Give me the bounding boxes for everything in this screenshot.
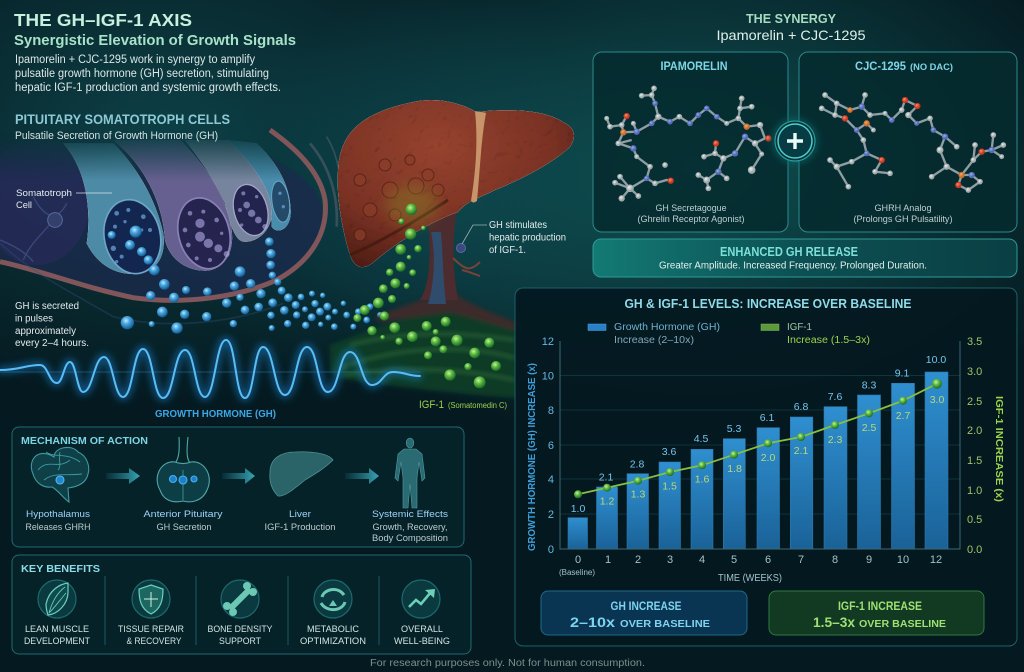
icon: rising trend bbox=[402, 580, 440, 618]
IGF-1 value labels: 2.7 bbox=[896, 410, 910, 422]
callout: hepatic production: of IGF-1. bbox=[489, 245, 526, 256]
GH value labels: 9.1 bbox=[895, 368, 909, 380]
right axis ticks: 0.0 bbox=[967, 544, 982, 556]
legend: IGF-1 bbox=[787, 322, 812, 333]
title block: hepatic IGF-1 production and systemic growth effects. bbox=[15, 82, 281, 94]
benefit labels: SUPPORT bbox=[219, 636, 261, 646]
x axis labels: 8 bbox=[832, 554, 838, 566]
GH value labels: 10.0 bbox=[926, 354, 946, 366]
x axis labels: 2 bbox=[635, 554, 641, 566]
title block bbox=[14, 10, 296, 94]
x axis labels: 0 bbox=[575, 554, 581, 566]
caption: CJC-1295: (Prolongs GH Pulsatility) bbox=[854, 214, 952, 225]
heading: pituitary somatotroph cells: Pulsatile Secretion of Growth Hormone (GH) bbox=[15, 130, 218, 142]
right axis ticks bbox=[967, 336, 982, 556]
molecule: ipamorelin bbox=[605, 86, 771, 201]
benefit labels: DEVELOPMENT bbox=[24, 636, 90, 646]
IGF-1 value labels: 1.6 bbox=[695, 474, 709, 486]
mechanism labels: IGF-1 Production bbox=[264, 522, 336, 533]
arrow: pituitary to liver bbox=[222, 468, 255, 484]
illustration: portal vein and tissue bbox=[330, 205, 518, 398]
x axis labels: 7 bbox=[798, 554, 804, 566]
banner: enhanced GH release: Greater Amplitude. Increased Frequency. Prolonged Duration. bbox=[659, 260, 927, 272]
heading: CJC-1295: (NO DAC) bbox=[910, 62, 953, 73]
heading: key benefits: KEY BENEFITS bbox=[21, 563, 100, 575]
heading: pituitary somatotroph cells: PITUITARY SOMATOTROPH CELLS bbox=[15, 112, 230, 127]
heading: CJC-1295: CJC-1295 bbox=[855, 61, 907, 73]
left axis ticks: 0 bbox=[548, 544, 554, 556]
GH value labels: 1.0 bbox=[571, 503, 585, 515]
caption: CJC-1295: GHRH Analog bbox=[874, 203, 932, 214]
left axis ticks: 6 bbox=[548, 440, 554, 452]
bars: growth hormone bbox=[568, 372, 948, 549]
stat: IGF-1 increase: 1.5–3x bbox=[813, 614, 855, 630]
illustration: IGF-1 green particles bbox=[353, 204, 501, 388]
mechanism labels: Growth, Recovery, bbox=[372, 522, 448, 533]
callout: somatotroph cell bbox=[16, 188, 112, 211]
right axis ticks: 0.5 bbox=[967, 514, 982, 526]
benefit labels bbox=[24, 624, 450, 646]
banner: enhanced GH release: ENHANCED GH RELEASE bbox=[720, 245, 858, 259]
IGF-1 value labels: 2.5 bbox=[862, 422, 876, 434]
callout: pulse timing: in pulses bbox=[15, 314, 53, 324]
GH value labels bbox=[571, 354, 946, 515]
label: IGF-1 somatomedin C bbox=[419, 399, 507, 411]
panel: GH and IGF-1 chart bbox=[515, 288, 1017, 646]
benefit labels: METABOLIC bbox=[307, 624, 360, 634]
GH value labels: 2.1 bbox=[599, 472, 613, 484]
icon: metabolic cycle bbox=[314, 580, 352, 618]
label: IGF-1 somatomedin C: IGF-1 bbox=[419, 399, 444, 411]
x axis labels: 3 bbox=[667, 554, 673, 566]
IGF-1 value labels: 2.1 bbox=[794, 445, 808, 457]
stat: GH increase bbox=[541, 591, 747, 635]
IGF-1 value labels: 2.3 bbox=[828, 434, 842, 446]
stat: IGF-1 increase bbox=[769, 591, 984, 635]
mechanism labels: Liver bbox=[289, 509, 311, 520]
GH value labels: 5.3 bbox=[727, 423, 741, 435]
callout: somatotroph cell: Somatotroph bbox=[16, 188, 72, 199]
x axis labels: 4 bbox=[699, 554, 705, 566]
left axis ticks bbox=[542, 336, 554, 556]
IGF-1 value labels: 1.2 bbox=[600, 496, 614, 508]
benefit labels: OPTIMIZATION bbox=[300, 636, 366, 646]
callout: hepatic production: hepatic production bbox=[489, 232, 566, 244]
mechanism labels: Hypothalamus bbox=[26, 509, 90, 520]
callout: pulse timing: every 2–4 hours. bbox=[15, 338, 89, 349]
title block: pulsatile growth hormone (GH) secretion, stimulating bbox=[15, 68, 269, 80]
chart: growth hormone pulse wave bbox=[0, 340, 420, 398]
heading: the synergy bbox=[716, 11, 866, 43]
axes bbox=[560, 341, 960, 549]
label: growth hormone: GROWTH HORMONE (GH) bbox=[155, 408, 276, 420]
right axis ticks: 1.0 bbox=[967, 485, 982, 497]
benefit labels: WELL-BEING bbox=[394, 636, 450, 646]
right axis ticks: 3.0 bbox=[967, 366, 982, 378]
benefit labels: BONE DENSITY bbox=[208, 624, 272, 634]
callout: pulse timing: approximately bbox=[15, 326, 76, 337]
arrow: liver to systemic effects bbox=[345, 468, 379, 484]
legend: Increase (1.5–3x) bbox=[787, 335, 870, 346]
benefit labels: OVERALL bbox=[401, 624, 443, 634]
icon: brain bbox=[31, 447, 89, 502]
heading: pituitary somatotroph cells bbox=[15, 112, 230, 142]
mechanism labels: Body Composition bbox=[372, 533, 448, 544]
IGF-1 value labels: 3.0 bbox=[930, 394, 944, 406]
x axis labels: (Baseline) bbox=[559, 568, 595, 577]
caption: ipamorelin: GH Secretagogue bbox=[656, 203, 726, 214]
callout: pulse timing: GH is secreted bbox=[15, 301, 79, 312]
title block: THE GH–IGF-1 AXIS bbox=[14, 10, 192, 30]
panel: key benefits bbox=[12, 555, 471, 654]
IGF-1 value labels: 1.8 bbox=[727, 463, 742, 475]
right axis title: IGF-1 INCREASE (x) bbox=[993, 396, 1004, 502]
heading: mechanism: MECHANISM OF ACTION bbox=[21, 435, 148, 447]
caption: CJC-1295 bbox=[854, 203, 952, 225]
left axis ticks: 10 bbox=[542, 370, 554, 382]
IGF-1 value labels bbox=[600, 394, 944, 508]
icon: liver bbox=[270, 452, 333, 496]
benefit labels: TISSUE REPAIR bbox=[118, 624, 184, 634]
arrow: hypothalamus to pituitary bbox=[106, 468, 140, 484]
legend bbox=[588, 322, 870, 346]
heading: ipamorelin: IPAMORELIN bbox=[660, 61, 728, 73]
heading: the synergy: THE SYNERGY bbox=[746, 11, 836, 26]
mechanism labels: Systemic Effects bbox=[372, 509, 448, 520]
legend: Increase (2–10x) bbox=[614, 335, 694, 346]
x axis labels: 10 bbox=[897, 554, 909, 566]
label: IGF-1 somatomedin C: (Somatomedin C) bbox=[448, 401, 507, 410]
benefit labels: LEAN MUSCLE bbox=[25, 624, 89, 634]
footer disclaimer: For research purposes only. Not for human consumption. bbox=[370, 658, 645, 669]
IGF-1 trend line bbox=[574, 379, 942, 498]
GH value labels: 2.8 bbox=[630, 458, 644, 470]
x axis labels: 5 bbox=[731, 554, 737, 566]
IGF-1 value labels: 2.0 bbox=[761, 452, 775, 464]
stat: GH increase: GH INCREASE bbox=[610, 599, 682, 613]
icon: muscle bbox=[38, 580, 76, 618]
illustration: liver bbox=[338, 100, 574, 267]
heading: the synergy: Ipamorelin + CJC-1295 bbox=[716, 27, 866, 43]
x axis labels: 1 bbox=[605, 554, 611, 566]
GH value labels: 6.1 bbox=[760, 412, 774, 424]
stat: IGF-1 increase: IGF-1 INCREASE bbox=[838, 599, 922, 613]
stat: IGF-1 increase: OVER BASELINE bbox=[859, 618, 946, 630]
caption: ipamorelin bbox=[638, 203, 744, 225]
illustration: pituitary somatotroph cells bbox=[0, 128, 383, 334]
IGF-1 value labels: 1.5 bbox=[662, 480, 677, 492]
chart title: GH & IGF-1 LEVELS: INCREASE OVER BASELINE bbox=[624, 296, 912, 311]
icon: pituitary bbox=[157, 437, 209, 502]
icon: bone bbox=[221, 580, 259, 618]
left axis ticks: 4 bbox=[548, 474, 554, 486]
panel: ipamorelin bbox=[593, 52, 788, 232]
right axis ticks: 3.5 bbox=[967, 336, 982, 348]
x axis labels: 12 bbox=[930, 554, 942, 566]
callout: somatotroph cell: Cell bbox=[16, 200, 32, 211]
GH value labels: 7.6 bbox=[828, 391, 842, 403]
stat: GH increase: 2–10x bbox=[570, 614, 615, 630]
banner: enhanced GH release bbox=[593, 239, 1017, 277]
left axis title: GROWTH HORMONE (GH) INCREASE (x) bbox=[527, 363, 538, 551]
heading: CJC-1295 bbox=[855, 61, 953, 73]
title block: Synergistic Elevation of Growth Signals bbox=[14, 32, 296, 49]
right axis ticks: 2.0 bbox=[967, 425, 982, 437]
icon: human body bbox=[395, 438, 425, 508]
panel: CJC-1295 bbox=[799, 52, 1017, 232]
GH value labels: 4.5 bbox=[694, 433, 708, 445]
left axis ticks: 2 bbox=[548, 509, 554, 521]
GH value labels: 8.3 bbox=[862, 380, 876, 392]
x axis labels bbox=[559, 554, 942, 584]
panel: mechanism of action bbox=[12, 427, 464, 547]
x axis labels: 9 bbox=[866, 554, 872, 566]
molecule: CJC-1295 bbox=[819, 93, 1006, 192]
benefit labels: & RECOVERY bbox=[126, 636, 182, 646]
mechanism labels: GH Secretion bbox=[156, 522, 212, 533]
GH value labels: 3.6 bbox=[662, 446, 676, 458]
IGF-1 value labels: 1.3 bbox=[631, 488, 645, 500]
stat: GH increase: OVER BASELINE bbox=[620, 618, 710, 630]
title block: Ipamorelin + CJC-1295 work in synergy to amplify bbox=[15, 54, 255, 66]
left axis ticks: 12 bbox=[542, 336, 554, 348]
mechanism labels: Releases GHRH bbox=[26, 522, 91, 533]
icon: shield bbox=[132, 580, 170, 618]
mechanism labels bbox=[26, 509, 448, 544]
callout: pulse timing bbox=[15, 301, 89, 349]
x axis labels: 6 bbox=[765, 554, 771, 566]
icon: plus badge bbox=[771, 117, 819, 165]
legend: Growth Hormone (GH) bbox=[614, 322, 720, 333]
right axis ticks: 2.5 bbox=[967, 396, 982, 408]
caption: ipamorelin: (Ghrelin Receptor Agonist) bbox=[638, 214, 744, 225]
GH value labels: 6.8 bbox=[794, 401, 808, 413]
right axis ticks: 1.5 bbox=[967, 455, 982, 467]
mechanism labels: Anterior Pituitary bbox=[144, 509, 223, 520]
callout: hepatic production: GH stimulates bbox=[489, 220, 547, 231]
x axis labels: TIME (WEEKS) bbox=[718, 572, 782, 584]
left axis ticks: 8 bbox=[548, 405, 554, 417]
callout: hepatic production bbox=[456, 220, 566, 256]
